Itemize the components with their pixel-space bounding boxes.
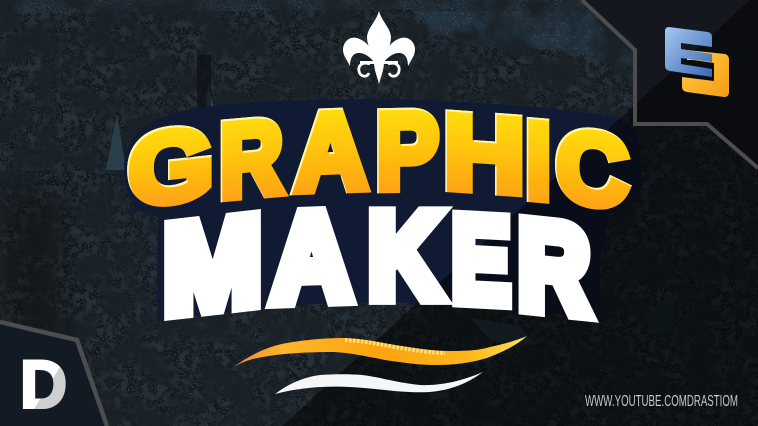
blue E xyxy=(665,27,712,77)
panel: bottom-left logo corner xyxy=(0,322,107,426)
swoosh: gold xyxy=(232,336,527,368)
title: GRAPHIC: P xyxy=(376,90,438,212)
diagonal shade over lower right xyxy=(282,0,758,426)
title: MAKER xyxy=(163,187,590,342)
swoosh highlight dashes xyxy=(345,340,445,353)
title: GRAPHIC: R xyxy=(219,96,283,220)
title: GRAPHIC xyxy=(128,90,628,229)
title: GRAPHIC: G xyxy=(128,106,213,227)
title: MAKER: K xyxy=(368,187,442,324)
title: GRAPHIC: H xyxy=(444,93,524,216)
title: GRAPHIC: I xyxy=(525,100,551,222)
swoosh: white xyxy=(275,372,483,394)
icon: fleur-de-lis xyxy=(343,11,415,84)
orange reversed E xyxy=(682,50,729,97)
title: MAKER: R xyxy=(518,194,590,342)
panel: top-right logo corner xyxy=(582,0,758,168)
icon: E logo xyxy=(665,27,729,97)
logo: D: D xyxy=(20,346,67,422)
title backing shape xyxy=(124,99,640,320)
title: MAKER: A xyxy=(271,187,352,329)
title: GRAPHIC: A xyxy=(294,90,367,214)
title: MAKER: M xyxy=(163,190,262,340)
title: MAKER: E xyxy=(452,191,510,329)
title: GRAPHIC: C xyxy=(556,109,628,229)
